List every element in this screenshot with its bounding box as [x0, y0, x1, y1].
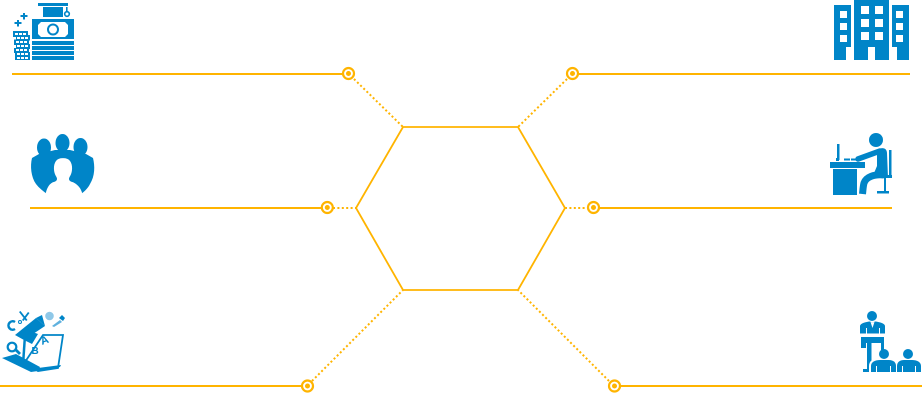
connector: top right — [518, 68, 910, 127]
graduation cap — [15, 318, 45, 340]
dropper — [52, 320, 62, 327]
scissors — [19, 311, 30, 321]
icon: tuition money and coins — [13, 3, 74, 60]
connector: middle left — [30, 202, 356, 213]
connector: middle right — [565, 202, 892, 213]
connector: top left — [12, 68, 403, 127]
icon: office buildings — [834, 0, 909, 60]
globe — [45, 312, 54, 320]
screen — [25, 335, 63, 371]
icon: presenter and audience — [860, 311, 921, 372]
central hexagon — [356, 127, 565, 290]
icon: laptop with graduation cap — [2, 311, 65, 372]
keyboard base — [2, 354, 40, 372]
letter B: B — [32, 346, 39, 357]
connector: bottom right — [518, 290, 922, 392]
icon: group of people — [31, 134, 94, 196]
magnifier — [8, 343, 16, 351]
icon: person working at desk — [830, 133, 892, 195]
connector: bottom left — [0, 290, 403, 392]
letter A: A — [39, 334, 51, 348]
letter C — [8, 321, 15, 330]
